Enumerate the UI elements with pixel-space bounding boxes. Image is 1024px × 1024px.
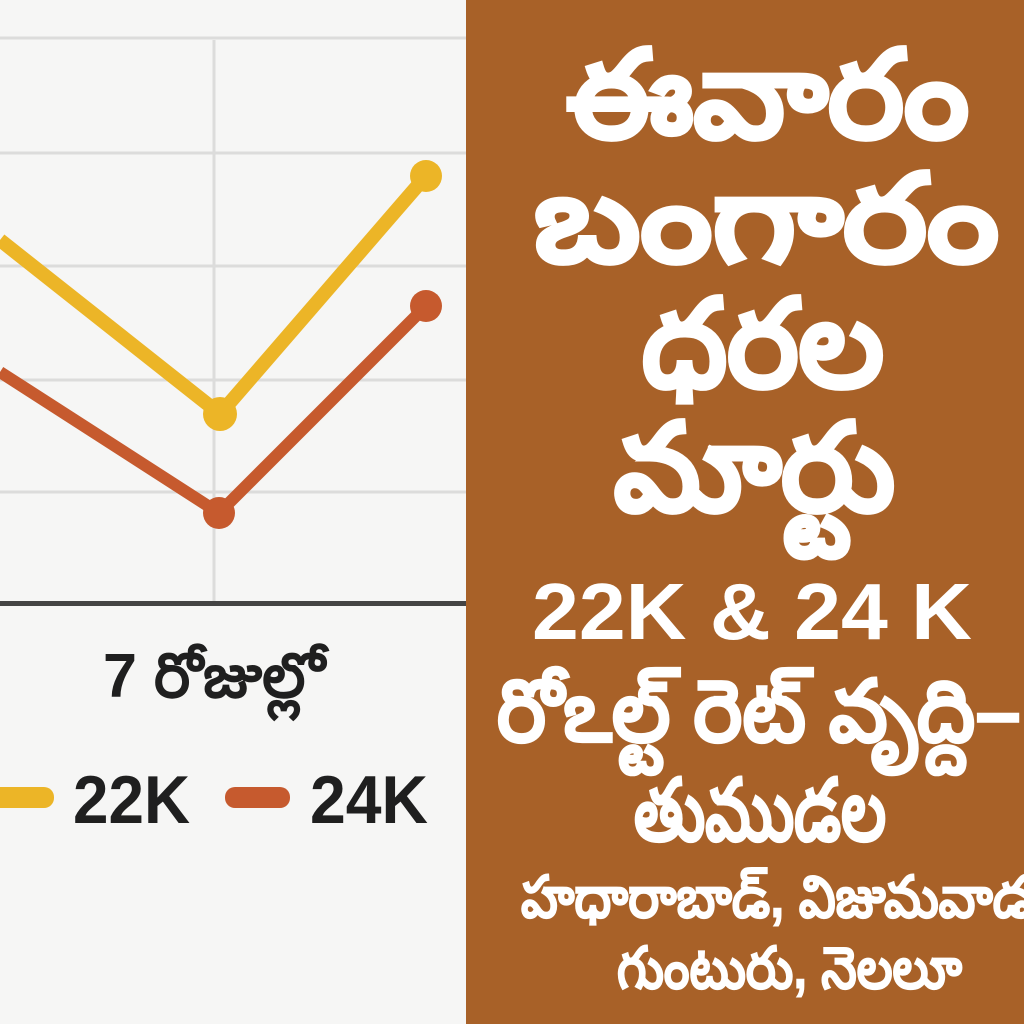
subheading: karat: 22K & 24 K xyxy=(532,567,972,656)
cities line 2: గుంటురు, నెలలూ xyxy=(617,936,962,1001)
chart caption: 7 రోజుల్లో xyxy=(103,642,330,722)
legend label: 24K: 24K xyxy=(310,762,428,838)
heading line: rates: ధరల xyxy=(642,276,884,412)
panel: title xyxy=(466,0,1024,1024)
legend swatch: 24K xyxy=(225,787,290,808)
heading line: change: మార్టు xyxy=(614,400,895,559)
panel: line chart xyxy=(0,0,466,1024)
line: 24K series xyxy=(0,290,442,529)
chart axis xyxy=(0,601,466,606)
heading line: this week: ఈవారం xyxy=(566,27,969,163)
line: 22K series xyxy=(0,160,442,431)
subheading: daily rate line 2: తుముడల xyxy=(634,763,886,859)
legend label: 22K: 22K xyxy=(73,762,190,838)
heading line: gold: బంగారం xyxy=(534,151,999,287)
legend swatch: 22K xyxy=(0,787,54,808)
